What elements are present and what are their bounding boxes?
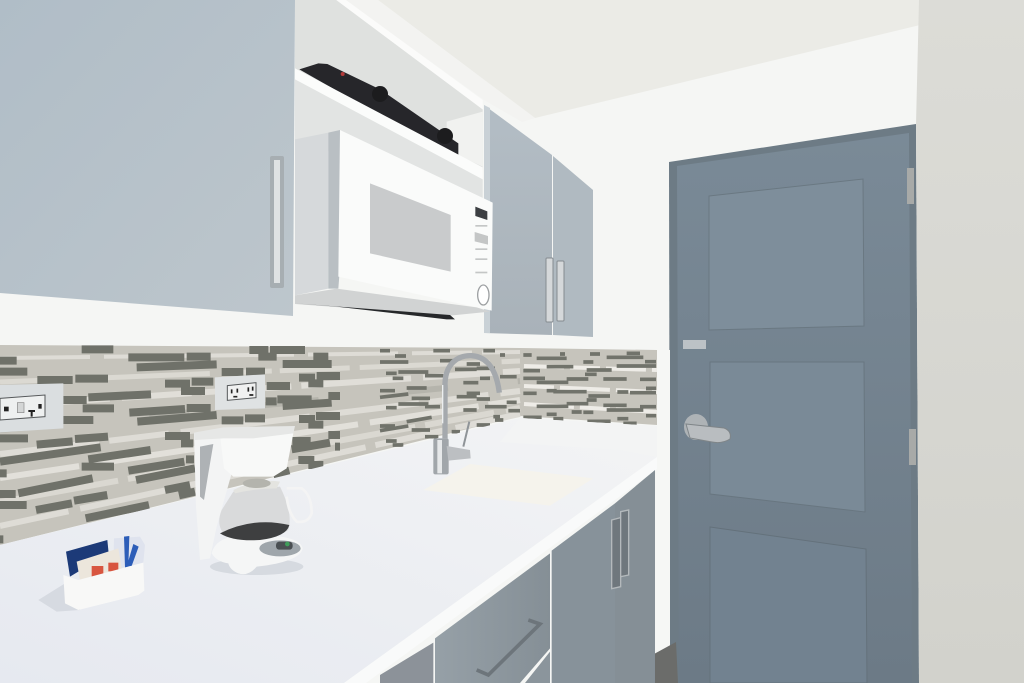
white wall strip beside door — [656, 350, 670, 650]
shelf interior upper — [295, 0, 483, 170]
lid — [194, 426, 295, 440]
right side wall — [916, 0, 1024, 683]
door plate — [683, 340, 706, 349]
upper cabinet right door — [553, 156, 593, 337]
coffee maker — [194, 426, 312, 575]
carafe base shadow — [210, 558, 303, 575]
griddle — [299, 63, 458, 156]
carafe handle — [287, 488, 312, 522]
door frame — [669, 124, 919, 683]
power outlet: right — [215, 374, 265, 410]
glass carafe — [219, 479, 290, 540]
hinge: lower — [909, 429, 916, 465]
drawer front — [435, 553, 550, 683]
countertop — [0, 418, 657, 683]
drawer handle — [477, 620, 540, 675]
faucet — [433, 356, 499, 474]
mosaic backsplash — [0, 345, 657, 545]
microwave side — [295, 133, 328, 295]
upper cabinet left door — [484, 105, 552, 335]
machine column — [194, 430, 232, 560]
microwave underside — [295, 289, 490, 316]
sink and faucet — [423, 356, 593, 506]
top shelf lip — [336, 0, 483, 109]
door panel: bottom — [710, 527, 867, 683]
door panel: middle — [710, 362, 865, 512]
shelf right panel — [447, 112, 483, 167]
base — [212, 535, 303, 574]
water gauge — [200, 444, 213, 500]
upper cabinet edge — [484, 105, 490, 333]
countertop front edge — [344, 457, 657, 683]
microwave keypad — [475, 225, 488, 273]
caddy shadow — [38, 583, 80, 612]
left cabinet front — [380, 643, 433, 683]
dark tiles left — [0, 349, 340, 539]
door leaf — [677, 133, 912, 683]
ceiling — [378, 0, 921, 118]
dark tiles centre and right — [380, 351, 656, 445]
upper right cabinets — [484, 105, 593, 337]
door handle: far — [621, 510, 629, 577]
cabinet handle: right — [557, 261, 564, 321]
caddy box — [63, 563, 144, 610]
power outlet: left — [0, 383, 63, 432]
microwave window — [370, 183, 451, 272]
light tile rows — [0, 352, 657, 526]
hinge: upper — [907, 168, 914, 204]
microwave front — [338, 130, 493, 311]
counter rear right surface — [500, 418, 657, 457]
baseboard — [654, 642, 678, 683]
microwave door edge — [328, 130, 340, 289]
soffit edge — [345, 0, 535, 122]
cabinet handle: left — [546, 258, 553, 322]
panel: left wall cabinet — [0, 0, 295, 316]
open shelf unit — [295, 0, 483, 203]
microwave — [295, 130, 493, 319]
lower drawer — [525, 652, 550, 683]
microwave dial — [478, 285, 489, 305]
tile base — [0, 345, 657, 545]
lower cabinets — [380, 470, 655, 683]
condiment caddy — [38, 536, 145, 612]
control panel — [259, 540, 301, 556]
door panel: top — [709, 179, 864, 330]
cabinet handle — [270, 156, 284, 288]
door handle: near — [612, 518, 621, 589]
sugar packets — [66, 536, 145, 580]
shelf lip — [295, 68, 483, 179]
shelf underside — [295, 79, 483, 203]
filter basket — [220, 433, 293, 477]
door lever handle — [684, 414, 730, 443]
microwave display — [475, 207, 487, 220]
door — [669, 124, 919, 683]
cabinet door: near — [552, 503, 615, 683]
microwave shadow — [295, 303, 455, 319]
sink basin — [423, 464, 593, 506]
cabinet door: far — [615, 470, 655, 683]
